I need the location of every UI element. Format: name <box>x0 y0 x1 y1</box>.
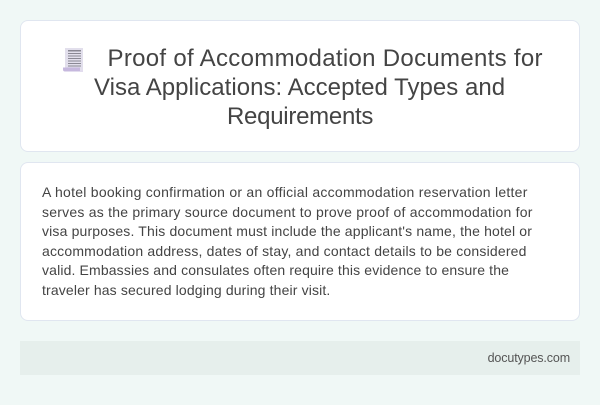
description text: A hotel booking confirmation or an official accommodation reservation letter <box>42 184 528 200</box>
title <box>94 45 543 130</box>
description text: accommodation address, dates of stay, and contact details to be considered <box>42 243 527 259</box>
footer source text: docutypes.com <box>488 351 570 365</box>
panel: description card <box>20 162 580 321</box>
title: Requirements <box>227 103 373 130</box>
description text: traveler has secured lodging during their visit. <box>42 282 330 298</box>
description text: visa purposes. This document must include the applicant's name, the hotel or <box>42 223 532 239</box>
footer bar <box>20 341 580 375</box>
title: Visa Applications: Accepted Types and <box>94 74 505 101</box>
description text: valid. Embassies and consulates often require this evidence to ensure the <box>42 262 509 278</box>
description text <box>42 184 533 298</box>
title: Proof of Accommodation Documents for <box>108 45 543 72</box>
icon: document scroll <box>63 48 83 72</box>
panel: title card <box>20 20 580 152</box>
description text: serves as the primary source document to prove proof of accommodation for <box>42 204 533 220</box>
